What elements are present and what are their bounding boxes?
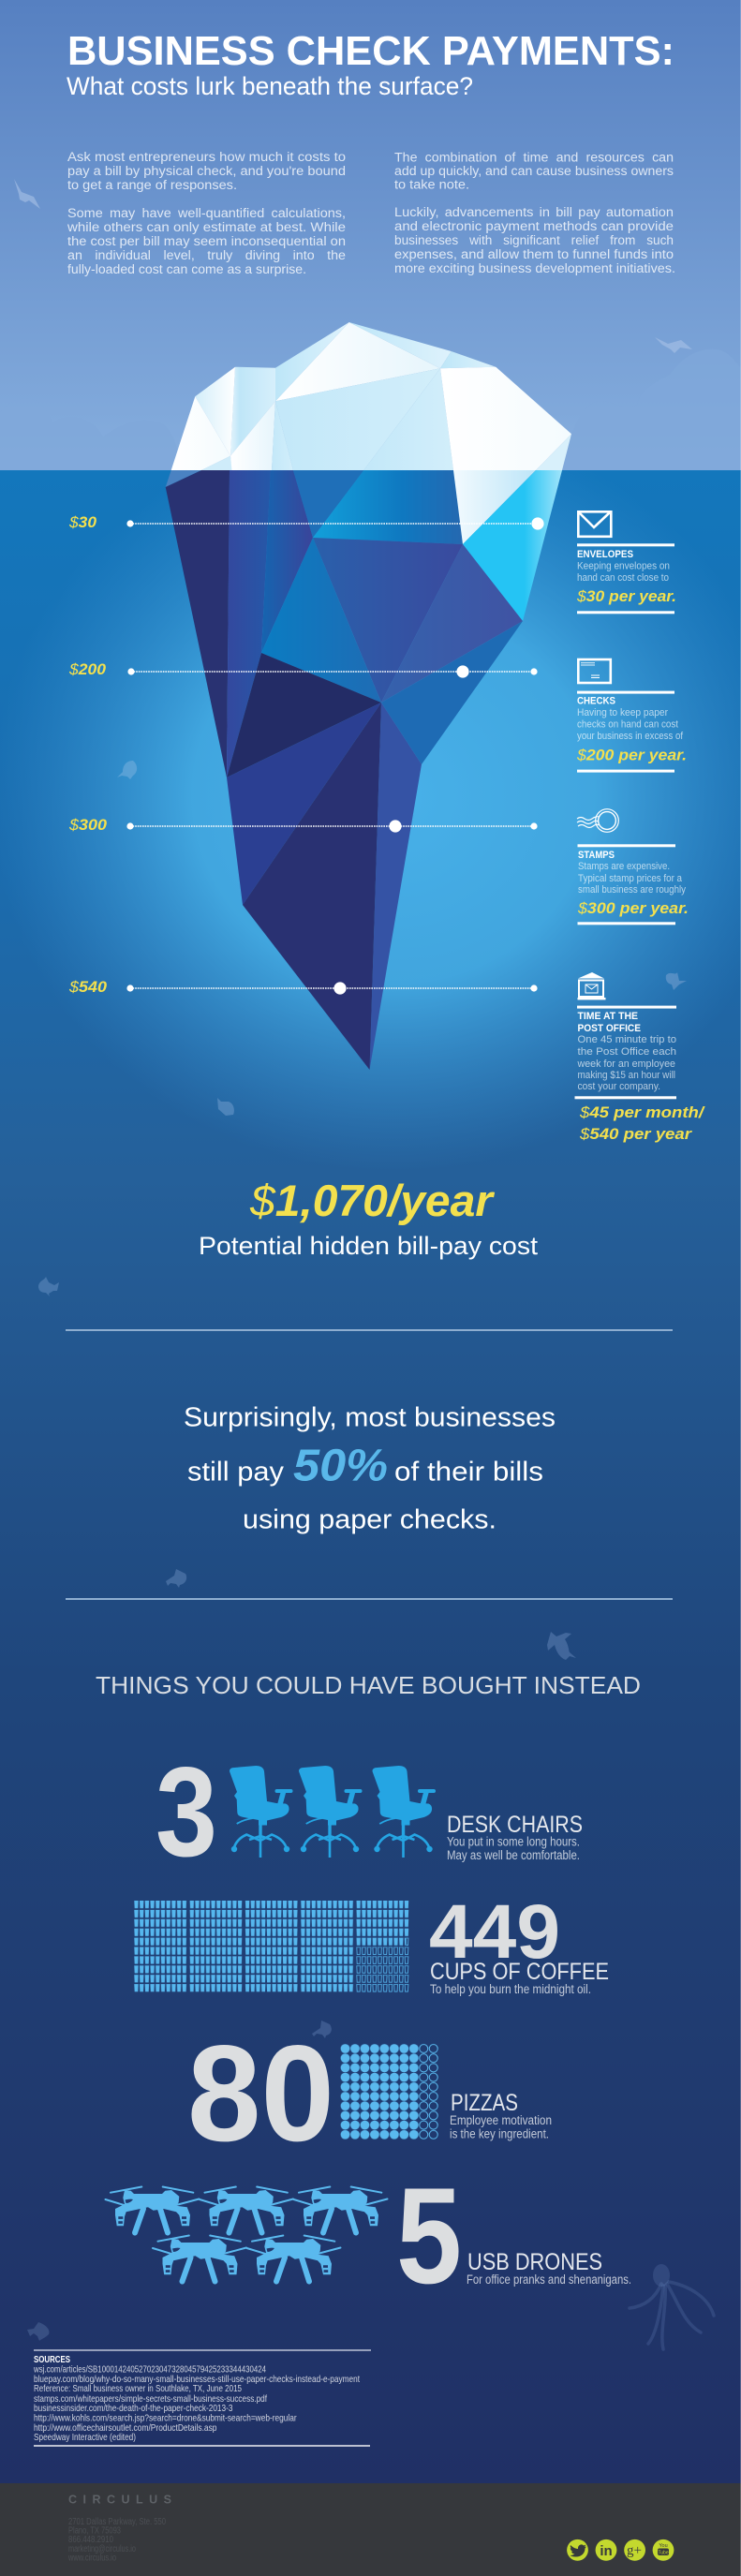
icon: envelope: [578, 511, 611, 537]
item: cups of coffee: To help you burn the midnight oil.: [430, 1982, 591, 1996]
item: cups of coffee: 449: [429, 1889, 560, 1975]
item: desk chairs: [156, 1740, 583, 1883]
footer address: 2701 Dallas Parkway, Ste. 550: [68, 2517, 166, 2527]
intro text: left column: Some may have well-quantified calculations,: [67, 206, 346, 220]
iceberg above water: [171, 322, 571, 470]
panel: checks: $200 per year.: [576, 747, 687, 764]
sources: wsj.com/articles/SB10001424052702304732804579425233344430424: [33, 2363, 266, 2375]
section heading: THINGS YOU COULD HAVE BOUGHT INSTEAD: [96, 1671, 641, 1699]
item: cups of coffee: CUPS OF COFFEE: [430, 1959, 609, 1985]
footer address: www.circulus.io: [67, 2554, 116, 2564]
footer address: marketing@circulus.io: [68, 2544, 136, 2554]
cost marker line: $540: $540: [68, 978, 108, 996]
item: usb drones: 5: [396, 2159, 462, 2312]
icon: youtube: You: [659, 2543, 668, 2549]
panel: envelopes: $30 per year.: [576, 587, 676, 605]
sources: SOURCES: [34, 2354, 70, 2365]
footer logo: CIRCULUS: [68, 2494, 171, 2507]
total cost caption: Potential hidden bill-pay cost: [199, 1232, 539, 1260]
icon: fish under iceberg: [217, 1098, 234, 1116]
item: pizzas: is the key ingredient.: [450, 2127, 549, 2141]
icon: fish mid: [166, 1569, 186, 1588]
panel: checks: [576, 659, 687, 773]
panel: time at the post office: week for an employee: [577, 1059, 675, 1070]
panel: time at the post office: [575, 972, 705, 1143]
footer address: Plano, TX 75093: [68, 2526, 121, 2537]
intro text: right column: Luckily, advancements in bill pay automation: [394, 205, 674, 219]
icon: post office: [577, 972, 605, 999]
cost marker line: $200: $200: [68, 660, 107, 678]
item: pizzas: [187, 2017, 552, 2169]
panel: envelopes: [576, 511, 676, 614]
footer address: 866.448.2910: [68, 2535, 113, 2545]
panel: time at the post office: One 45 minute trip to: [577, 1034, 676, 1045]
panel: envelopes: ENVELOPES: [577, 549, 633, 560]
panel: checks: CHECKS: [577, 696, 615, 707]
icon: youtube: Tube: [658, 2551, 669, 2556]
cost marker line: $200: [68, 660, 538, 678]
iceberg below water: [166, 470, 562, 1070]
subtitle: What costs lurk beneath the surface?: [67, 72, 473, 100]
statement: 50 percent: 50%: [293, 1442, 388, 1491]
panel: stamps: Typical stamp prices for a: [578, 873, 683, 884]
cost marker line: $300: $300: [68, 816, 108, 834]
intro text: left column: fully-loaded cost can come as a surprise.: [67, 262, 306, 276]
intro text: left column: while others can only estimate at best. While: [67, 220, 346, 234]
statement: 50 percent: still pay: [187, 1458, 285, 1488]
statement: 50 percent: using paper checks.: [243, 1505, 496, 1535]
item: desk chairs: 3: [156, 1740, 217, 1883]
intro text: right column: add up quickly, and can cause business owners: [394, 164, 674, 178]
cost marker line: $30: $30: [68, 513, 97, 531]
statement: 50 percent: of their bills: [394, 1458, 543, 1488]
panel: time at the post office: $45 per month/: [579, 1103, 705, 1121]
icon: drones: [105, 2186, 388, 2282]
panel: envelopes: Keeping envelopes on: [577, 561, 670, 572]
icon: google plus: g+: [627, 2543, 642, 2558]
icon: linkedin: in: [600, 2543, 613, 2559]
statement: 50 percent: [184, 1403, 556, 1535]
intro text: left column: [67, 150, 346, 276]
left cloud: [0, 399, 183, 470]
sources: Speedway Interactive (edited): [34, 2432, 136, 2443]
intro text: left column: the cost per bill may seem inconsequential on: [67, 234, 346, 248]
intro text: left column: Ask most entrepreneurs how much it costs to: [67, 150, 346, 164]
panel: stamps: small business are roughly: [578, 884, 686, 896]
item: pizzas: PIZZAS: [451, 2090, 518, 2116]
icon: youtube: [653, 2539, 674, 2561]
icon: linkedin: [596, 2539, 616, 2561]
icon: fish near post office: [666, 972, 687, 990]
item: usb drones: For office pranks and shenanigans.: [467, 2273, 631, 2287]
intro text: right column: expenses, and allow them to funnel funds into: [394, 247, 674, 261]
chart: coffee cup grid: [134, 1901, 412, 1993]
intro text: right column: businesses with significant relief from such: [394, 233, 674, 247]
cost marker line: $540: [68, 978, 538, 996]
panel: time at the post office: cost your company.: [577, 1081, 660, 1092]
sources: http://www.officechairsoutlet.com/ProductDetails.asp: [34, 2422, 217, 2434]
icon: fish near sources: [27, 2322, 50, 2341]
item: desk chairs: You put in some long hours.: [447, 1835, 580, 1849]
water background: [0, 470, 741, 2484]
sources: businessinsider.com/the-death-of-the-paper-check-2013-3: [34, 2403, 233, 2414]
panel: checks: your business in excess of: [577, 731, 684, 742]
icon: stamp: [577, 809, 618, 832]
panel: time at the post office: $540 per year: [579, 1125, 693, 1143]
statement: 50 percent: Surprisingly, most businesses: [184, 1403, 556, 1433]
item: usb drones: USB DRONES: [467, 2249, 602, 2275]
panel: time at the post office: making $15 an hour will: [577, 1070, 675, 1081]
intro text: left column: pay a bill by physical check, and you're bound: [67, 164, 346, 178]
icon: google plus: [624, 2539, 645, 2561]
panel: checks: Having to keep paper: [577, 707, 668, 718]
chart: pizza dot grid: [340, 2044, 438, 2139]
cost marker line: $300: [68, 816, 538, 834]
right cloud: [562, 349, 741, 470]
item: cups of coffee: [134, 1889, 609, 1996]
sky background: [0, 0, 741, 471]
decorative sea life: fish: [117, 761, 137, 779]
panel: stamps: STAMPS: [578, 850, 615, 861]
footer: [0, 2483, 741, 2576]
panel: time at the post office: POST OFFICE: [577, 1023, 641, 1034]
icon: turtle: [547, 1632, 576, 1660]
sources: bluepay.com/blog/why-do-so-many-small-businesses-still-use-paper-checks-instead-e-payment: [34, 2374, 360, 2385]
icon: fish at left: [38, 1277, 59, 1296]
footer address: [67, 2517, 166, 2564]
panel: stamps: [577, 809, 689, 925]
sources: http://www.kohls.com/search.jsp?search=drone&submit-search=web-regular: [34, 2413, 297, 2424]
panel: stamps: Stamps are expensive.: [578, 861, 670, 872]
panel: time at the post office: TIME AT THE: [577, 1011, 638, 1022]
icon: octopus: [630, 2264, 714, 2349]
intro text: left column: an individual level, truly diving into the: [67, 248, 346, 262]
item: pizzas: Employee motivation: [450, 2113, 552, 2127]
icon: bird right: [655, 337, 692, 353]
icon: check: [578, 659, 611, 683]
intro text: right column: [394, 150, 675, 275]
icon: bird left: [14, 179, 40, 209]
intro text: right column: and electronic payment methods can provide: [394, 219, 674, 233]
sources: Reference: Small business owner in Southlake, TX, June 2015: [34, 2383, 242, 2394]
cost marker line: $30: [68, 513, 544, 531]
intro text: left column: to get a range of responses.: [67, 178, 237, 192]
icon: twitter: [567, 2539, 588, 2561]
item: pizzas: 80: [187, 2017, 334, 2169]
panel: checks: checks on hand can cost: [577, 719, 678, 731]
item: desk chairs: DESK CHAIRS: [447, 1812, 583, 1838]
intro text: right column: to take note.: [394, 178, 469, 191]
panel: stamps: $300 per year.: [577, 899, 689, 917]
item: desk chairs: May as well be comfortable.: [447, 1848, 580, 1862]
sources: stamps.com/whitepapers/simple-secrets-small-business-success.pdf: [34, 2393, 267, 2405]
intro text: right column: The combination of time and resources can: [394, 150, 674, 165]
sources: [33, 2349, 371, 2447]
panel: envelopes: hand can cost close to: [577, 572, 669, 584]
item: usb drones: [105, 2159, 631, 2312]
icon: chairs: [230, 1766, 434, 1858]
total cost: $1,070/year: [249, 1176, 496, 1225]
panel: time at the post office: the Post Office each: [577, 1046, 676, 1058]
title: BUSINESS CHECK PAYMENTS:: [67, 28, 674, 74]
intro text: right column: more exciting business development initiatives.: [394, 261, 675, 275]
icon: fish lower: [312, 2021, 332, 2038]
